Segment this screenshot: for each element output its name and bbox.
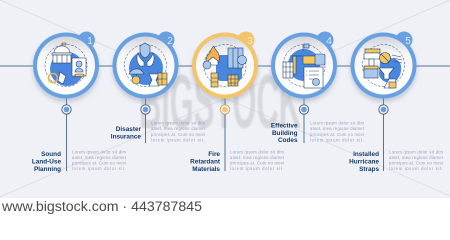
step 5 heading: Hurricane [349,158,379,165]
step 4 body text [310,120,365,142]
step 5 body text: lorem ipsum dolor sit. [389,166,443,171]
step 5 body text: Lorem ipsum dolor sit dim [389,150,444,154]
step 5 body text [389,150,444,171]
step 4 body text: amet, mea regione diamet [310,126,365,131]
step 3 heading: Fire [208,151,220,158]
step 2: disaster insurance [111,32,206,143]
step 2 body text: principes at. Cum no movi [151,132,205,137]
step 1 heading [32,151,61,173]
step 4 circle: 4 [326,36,332,47]
step 3 heading: Materials [192,166,220,173]
step 1 body text: Lorem ipsum dolor sit dim [72,150,126,154]
icon: government building and card [48,43,86,86]
step 4 body text: principes at. Cum no movi [310,132,364,137]
step 5 body text: amet, mea regione diamet [389,155,444,160]
step 5 heading: Straps [359,166,379,173]
step 2 circle: 2 [167,36,173,47]
step 4 body text: Lorem ipsum dolor sit dim [310,120,364,126]
step 4: effective building codes [271,32,365,144]
step 3 heading [190,151,221,173]
step 5 circle: 5 [405,36,411,47]
step 5 node [379,105,388,114]
step 1 heading: Sound [41,151,61,158]
step 1 body text [72,150,127,171]
step 4 body text: lorem ipsum dolor sit. [310,138,364,142]
step 3 heading: Retardant [190,158,221,165]
step 2 node [141,105,150,114]
step 5 body text: principes at. Cum no movi [389,160,443,166]
step 1: sound land-use planning [32,32,127,173]
step 2 body text: amet, mea regione diamet [151,126,206,131]
step 5 heading [349,151,379,173]
step 5: installed hurricane straps [349,32,444,173]
step 2 body text: Lorem ipsum dolor sit dim [151,120,206,126]
step 4 heading: Codes [278,137,298,144]
step 2 heading: Insurance [111,134,141,140]
step 1 heading: Land-Use [32,158,61,165]
icon: straps, prohibition sign, funnel [364,49,402,88]
step 2 body text: lorem ipsum dolor sit. [151,138,205,142]
step 1 heading: Planning [34,166,61,173]
step 5 circle [350,32,416,102]
step 3 circle [192,32,258,102]
step 3 body text [230,150,285,171]
step 4 heading: Effective [271,122,298,130]
step 1 body text: amet, mea regione diamet [72,155,127,160]
step 1 node [62,105,71,114]
icon: crane, document, building [283,44,325,88]
step 2 body text [151,120,206,142]
step 4 node [299,105,309,114]
step 3 body text: principes at. Cum no movi [230,160,284,166]
step 3 body text: lorem ipsum dolor sit. [230,166,284,171]
step 1 body text: principes at. Cum no movi [72,160,126,166]
step 3 body text: Lorem ipsum dolor sit dim [230,150,284,154]
step 1 body text: lorem ipsum dolor sit. [72,166,126,171]
step 2 heading: Disaster [116,126,142,133]
footer: stock site credit: www.bigstock.com · 443787845 [1,198,202,214]
icon: flame, buildings, shield [203,46,246,87]
step 4 heading [271,122,298,144]
step 1 circle [33,32,99,102]
step 3: fire retardant materials [190,32,285,173]
step 3 circle: 3 [247,36,253,47]
icon: shield, hands, umbrella [129,43,167,86]
step 2 heading [111,126,142,140]
step 4 heading: Building [272,130,298,137]
step 3 node [220,105,230,114]
step 5 heading: Installed [353,151,379,158]
step 3 body text: amet, mea regione diamet [230,155,285,160]
step 1 circle: 1 [87,36,93,47]
